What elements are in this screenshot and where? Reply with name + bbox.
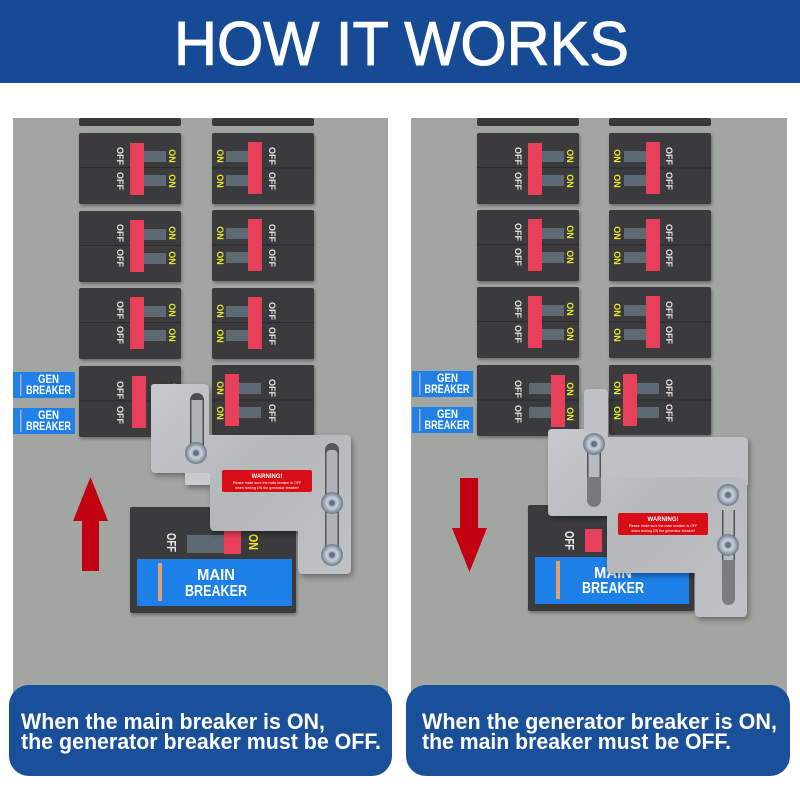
gen breaker label 1 bbox=[13, 372, 75, 398]
breaker: right column row 4: OFF bbox=[267, 404, 277, 422]
screw bbox=[321, 492, 343, 514]
breaker: left column row 3: OFF bbox=[513, 300, 523, 318]
gen breaker label 2 bbox=[13, 408, 75, 434]
breaker: left column row 3: OFF bbox=[115, 326, 125, 344]
breaker: right column row 1: ON bbox=[215, 149, 225, 163]
breaker: right column row 2: ON bbox=[612, 251, 622, 265]
warning label: Please make sure the main breaker is OFF bbox=[629, 524, 698, 528]
breaker: right column row 2: OFF bbox=[267, 249, 277, 267]
breaker: left column row 2: OFF bbox=[115, 224, 125, 242]
breaker: left column row 4: OFF bbox=[115, 381, 125, 399]
breaker: left column row 1: OFF bbox=[115, 172, 125, 190]
breaker: left column row 2: OFF bbox=[513, 223, 523, 241]
breaker: right column row 2: OFF bbox=[267, 224, 277, 242]
gen breaker label 1: GEN bbox=[38, 372, 59, 386]
partial breakers at top edge bbox=[477, 118, 711, 126]
breaker: right column row 3: OFF bbox=[664, 301, 674, 319]
breaker: left column row 2: ON bbox=[565, 225, 575, 239]
screw bbox=[185, 442, 207, 464]
breaker: left column row 1: ON bbox=[167, 149, 177, 163]
breaker: right column row 1: OFF bbox=[664, 147, 674, 165]
breaker: left column row 1: OFF bbox=[513, 147, 523, 165]
breaker: right column row 2: ON bbox=[215, 251, 225, 265]
main breaker: OFF bbox=[562, 531, 576, 550]
breaker: left column row 3 bbox=[477, 287, 579, 358]
arrow up bbox=[73, 477, 108, 571]
breaker: right column row 4: ON bbox=[612, 381, 622, 395]
breaker: right column row 3: ON bbox=[215, 304, 225, 318]
breaker: left column row 2 bbox=[79, 211, 181, 282]
breaker: left column row 1: OFF bbox=[513, 172, 523, 190]
gen breaker label 1: BREAKER bbox=[424, 382, 470, 396]
callout: left: the generator breaker must be OFF. bbox=[21, 729, 381, 754]
interlock plate: locked down bbox=[548, 389, 748, 617]
breaker: right column row 1: ON bbox=[612, 174, 622, 188]
breaker: left column row 2 bbox=[477, 210, 579, 281]
callout: left: When the main breaker is ON, bbox=[21, 709, 325, 734]
breaker: left column row 3: OFF bbox=[513, 325, 523, 343]
breaker: left column row 4: ON bbox=[565, 407, 575, 421]
breaker: right column row 1: OFF bbox=[267, 172, 277, 190]
breaker: left column row 4: OFF bbox=[513, 405, 523, 423]
partial breakers at top edge bbox=[79, 118, 314, 126]
breaker: right column row 1: ON bbox=[215, 174, 225, 188]
warning label: WARNING! bbox=[252, 474, 282, 480]
breaker: right column row 2 bbox=[609, 210, 711, 281]
title: HOW IT WORKS bbox=[174, 10, 629, 79]
breaker: right column row 3: ON bbox=[215, 329, 225, 343]
warning label bbox=[222, 470, 312, 492]
callout: right: When the generator breaker is ON, bbox=[422, 709, 777, 734]
callout: right: the main breaker must be OFF. bbox=[422, 729, 731, 754]
breaker: right column row 2: OFF bbox=[664, 249, 674, 267]
breaker: left column row 4: OFF bbox=[115, 406, 125, 424]
breaker: left column row 4: ON bbox=[169, 383, 179, 397]
breaker: left column row 3: OFF bbox=[115, 301, 125, 319]
breaker: left column row 1: ON bbox=[565, 174, 575, 188]
breaker: left column row 3: ON bbox=[565, 327, 575, 341]
breaker: left column row 2: ON bbox=[167, 251, 177, 265]
breaker: right column row 1: ON bbox=[612, 149, 622, 163]
breaker: left column row 1 bbox=[477, 133, 579, 204]
screw bbox=[583, 433, 605, 455]
breaker: left column row 2: OFF bbox=[513, 248, 523, 266]
breaker: left column row 4 bbox=[477, 365, 579, 436]
gen breaker label 1: GEN bbox=[437, 371, 458, 385]
gen breaker label 2 bbox=[412, 407, 473, 433]
breaker: right column row 3: ON bbox=[612, 328, 622, 342]
main breaker: ON bbox=[246, 534, 260, 550]
title banner bbox=[0, 0, 800, 83]
breaker: right column row 2: ON bbox=[612, 226, 622, 240]
main breaker: MAIN bbox=[594, 565, 632, 582]
warning label: WARNING! bbox=[648, 517, 678, 523]
breaker: right column row 1: OFF bbox=[664, 172, 674, 190]
breaker: right column row 3: OFF bbox=[664, 326, 674, 344]
breaker: right column row 3: OFF bbox=[267, 327, 277, 345]
main breaker: BREAKER bbox=[185, 583, 247, 600]
breaker: left column row 3: ON bbox=[565, 302, 575, 316]
breaker: right column row 4: ON bbox=[612, 406, 622, 420]
breaker: right column row 3: ON bbox=[612, 303, 622, 317]
breaker: right column row 2: ON bbox=[215, 226, 225, 240]
interlock plate: locked up bbox=[151, 384, 351, 574]
breaker: right column row 4: ON bbox=[215, 406, 225, 420]
breaker: right column row 2: OFF bbox=[664, 224, 674, 242]
breaker: right column row 1: OFF bbox=[267, 147, 277, 165]
main breaker: MAIN bbox=[197, 567, 235, 584]
panel: main breaker ON bbox=[13, 118, 388, 708]
slots bbox=[587, 450, 735, 605]
screw bbox=[717, 534, 739, 556]
gen breaker label 2: GEN bbox=[38, 408, 59, 422]
breaker: right column row 4: OFF bbox=[664, 379, 674, 397]
breaker: left column row 1 bbox=[79, 133, 181, 204]
screw bbox=[321, 544, 343, 566]
main breaker bbox=[130, 507, 296, 613]
slots bbox=[190, 393, 339, 561]
breaker: left column row 1: ON bbox=[565, 149, 575, 163]
callout: left bbox=[9, 685, 392, 776]
warning label: Please make sure the main breaker is OFF bbox=[233, 481, 302, 485]
breaker: right column row 4: OFF bbox=[267, 379, 277, 397]
breaker: left column row 4: ON bbox=[565, 382, 575, 396]
main breaker: OFF bbox=[164, 533, 178, 552]
breaker: left column row 1: OFF bbox=[115, 147, 125, 165]
breaker: right column row 3: OFF bbox=[267, 302, 277, 320]
breaker: right column row 3 bbox=[212, 288, 314, 359]
breaker: left column row 4 bbox=[79, 366, 181, 437]
gen breaker label 2: GEN bbox=[437, 407, 458, 421]
breaker: right column row 2 bbox=[212, 210, 314, 281]
panel: generator breaker ON bbox=[411, 118, 787, 708]
breaker: right column row 4: OFF bbox=[664, 404, 674, 422]
gen breaker label 2: BREAKER bbox=[424, 418, 470, 432]
breaker: left column row 2: ON bbox=[565, 250, 575, 264]
breaker: right column row 1 bbox=[609, 133, 711, 204]
callout: right bbox=[406, 685, 790, 776]
gen breaker label 1: BREAKER bbox=[26, 383, 71, 397]
breaker: left column row 3: ON bbox=[167, 303, 177, 317]
breaker: left column row 2: OFF bbox=[115, 249, 125, 267]
breaker: left column row 2: ON bbox=[167, 226, 177, 240]
warning label: when turning ON the generator breaker! bbox=[235, 486, 299, 490]
gen breaker label 1 bbox=[412, 371, 473, 397]
breaker: right column row 4 bbox=[212, 365, 314, 435]
breaker: left column row 1: ON bbox=[167, 174, 177, 188]
screw bbox=[717, 484, 739, 506]
breaker: right column row 3 bbox=[609, 287, 711, 358]
warning label bbox=[618, 513, 708, 535]
breaker: right column row 1 bbox=[212, 133, 314, 204]
gen breaker label 2: BREAKER bbox=[26, 419, 71, 433]
main breaker bbox=[528, 505, 694, 611]
arrow down bbox=[452, 478, 487, 572]
breaker: left column row 4: OFF bbox=[513, 380, 523, 398]
breaker: right column row 4: ON bbox=[215, 381, 225, 395]
warning label: when turning ON the generator breaker! bbox=[631, 529, 695, 533]
main breaker: BREAKER bbox=[582, 580, 644, 597]
breaker: left column row 3 bbox=[79, 288, 181, 359]
breaker: left column row 3: ON bbox=[167, 328, 177, 342]
breaker: right column row 4 bbox=[609, 365, 711, 435]
